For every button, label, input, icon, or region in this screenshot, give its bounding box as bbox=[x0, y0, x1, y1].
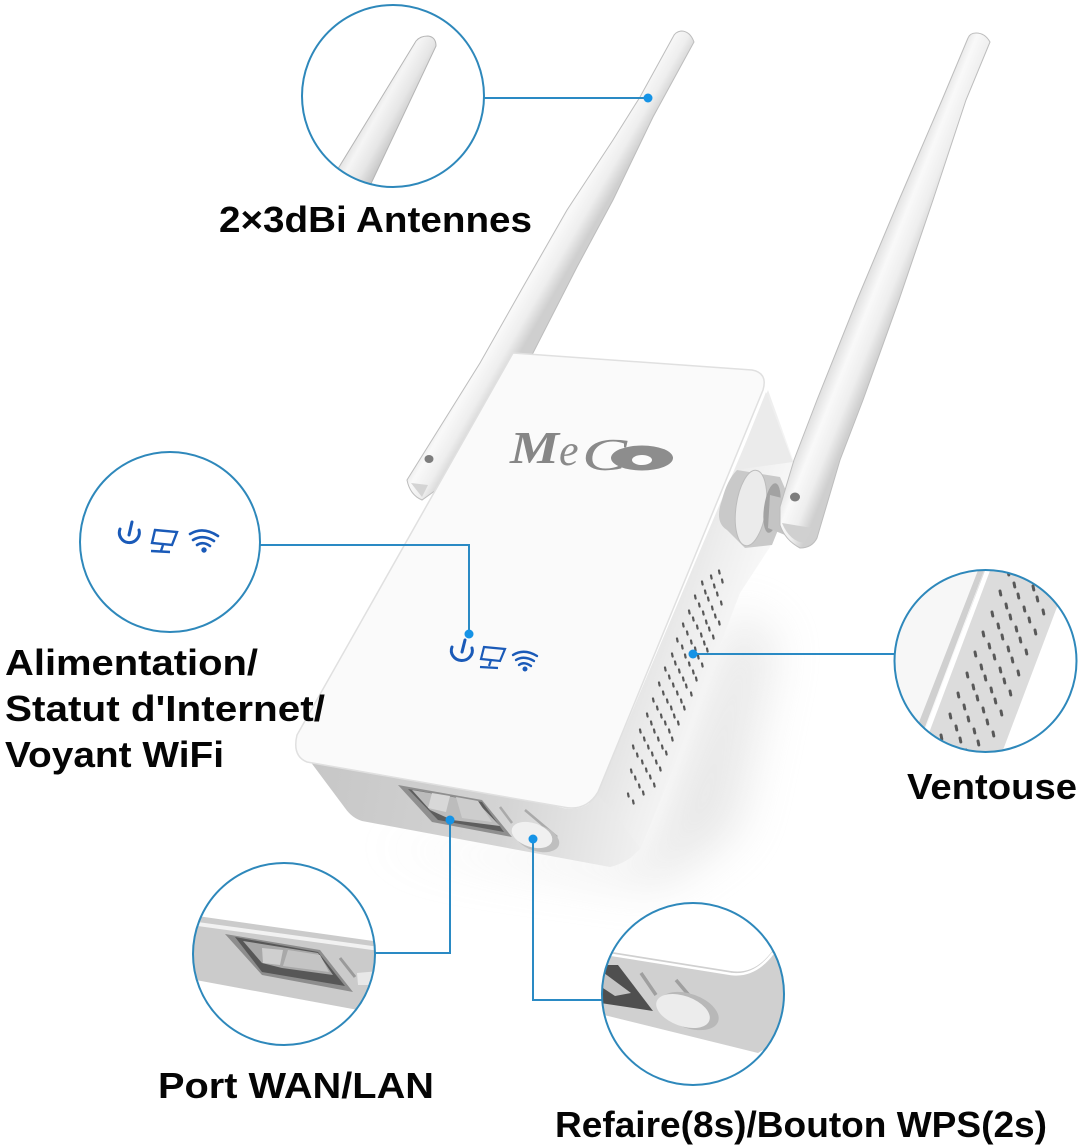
text block: LED labels: Voyant WiFi bbox=[5, 734, 224, 775]
panel: antenna detail circle bbox=[302, 5, 484, 190]
callout: antennas line bbox=[484, 94, 652, 102]
callout: port line bbox=[375, 816, 454, 953]
panel: top face bbox=[296, 353, 764, 808]
heading: port: Port WAN/LAN bbox=[158, 1065, 434, 1106]
text block: LED labels: Statut d'Internet/ bbox=[5, 688, 325, 729]
right antenna bbox=[780, 33, 990, 548]
text block: LED labels bbox=[5, 642, 325, 775]
icon: wifi LED bbox=[513, 652, 537, 670]
heading: ventouse: Ventouse bbox=[907, 766, 1077, 807]
icon: power LED bbox=[451, 640, 472, 661]
callout: button line bbox=[528, 834, 604, 1000]
port bbox=[398, 785, 512, 837]
panel: LED detail circle bbox=[80, 452, 260, 632]
antenna base bbox=[719, 468, 790, 548]
icon: power bbox=[119, 522, 139, 543]
icon: internet LED bbox=[480, 647, 505, 668]
logo bbox=[509, 422, 673, 480]
heading: antennas: 2×3dBi Antennes bbox=[219, 199, 532, 240]
panel: button detail circle bbox=[600, 903, 790, 1085]
callout: ventouse line bbox=[688, 650, 895, 658]
icon: wifi bbox=[190, 530, 218, 551]
device body bbox=[296, 353, 795, 867]
device shadow bbox=[370, 610, 775, 885]
panel: front face bbox=[298, 745, 640, 867]
icon: internet bbox=[151, 530, 177, 552]
logo: e bbox=[559, 426, 579, 475]
panel: port detail circle bbox=[190, 863, 380, 1045]
logo: C bbox=[582, 429, 629, 480]
heading: reset and WPS: Refaire(8s)/Bouton WPS(2s) bbox=[555, 1104, 1047, 1145]
callout: LEDs line bbox=[260, 545, 474, 638]
left antenna bbox=[407, 31, 694, 500]
text block: LED labels: Alimentation/ bbox=[5, 642, 258, 683]
panel: side with vents bbox=[588, 390, 795, 867]
logo: M bbox=[509, 422, 562, 473]
panel: ventouse detail circle bbox=[894, 569, 1078, 753]
button bbox=[500, 807, 563, 857]
